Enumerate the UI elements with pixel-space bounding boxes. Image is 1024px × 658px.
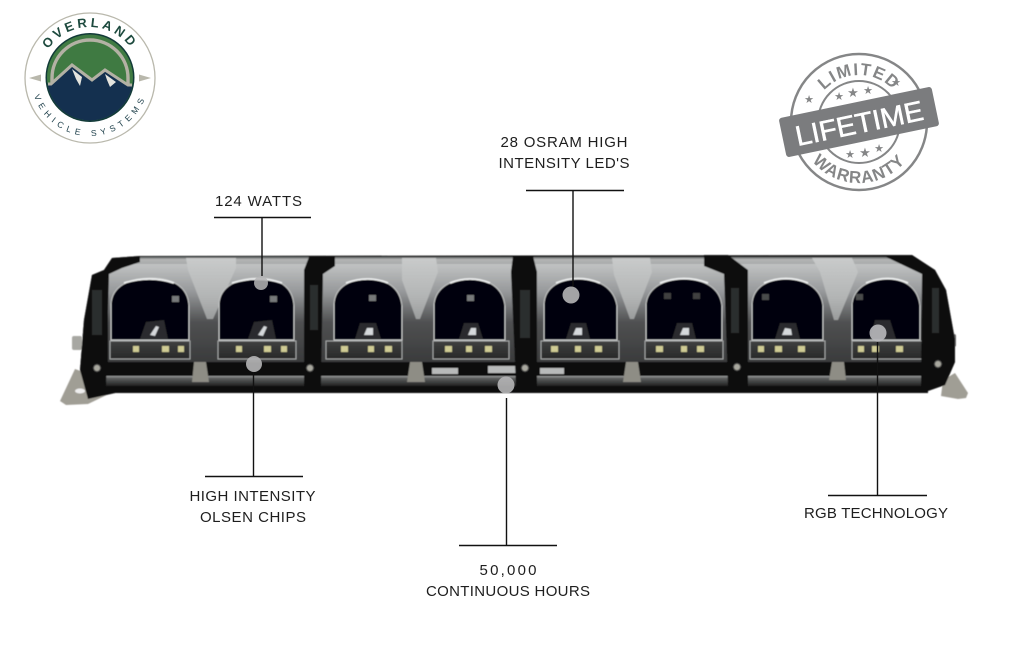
domes bbox=[111, 278, 920, 340]
callout: 28 Osram LEDs: 28 OSRAM HIGH bbox=[500, 134, 628, 151]
mounting feet bbox=[60, 369, 115, 405]
callout: 28 Osram LEDs: INTENSITY LED'S bbox=[498, 155, 630, 172]
callout: Olsen chips: OLSEN CHIPS bbox=[200, 509, 306, 526]
stamp stars: ★ bbox=[804, 94, 814, 106]
stamp stars: ★ bbox=[859, 145, 871, 160]
top cover and lens housing bbox=[130, 257, 900, 269]
logo: Overland Vehicle Systems badge bbox=[24, 12, 156, 144]
logo text: OVERLAND: OVERLAND bbox=[43, 18, 135, 48]
dome highlights bbox=[124, 278, 908, 283]
stamp ribbon: LIFETIME bbox=[793, 95, 926, 152]
stamp text: WARRANTY: WARRANTY bbox=[814, 153, 902, 184]
lower rail bbox=[104, 362, 928, 376]
callout: 50,000 hours: CONTINUOUS HOURS bbox=[426, 583, 590, 600]
stamp stars: ★ bbox=[834, 91, 844, 103]
callout: 50,000 hours bbox=[426, 376, 590, 600]
stamp stars: ★ bbox=[874, 143, 884, 155]
rail reflections bbox=[432, 366, 564, 374]
V-shaped lens dividers bbox=[186, 258, 858, 320]
product: LED light bar bbox=[60, 255, 968, 405]
stamp stars: ★ bbox=[847, 85, 859, 100]
stamp text: LIMITED: LIMITED bbox=[817, 63, 898, 90]
callout: RGB technology bbox=[804, 324, 948, 522]
clamp highlights bbox=[92, 285, 939, 338]
callout: 124 watts: 124 WATTS bbox=[215, 193, 302, 210]
callout: 50,000 hours: 50,000 bbox=[480, 562, 536, 579]
callout: 124 watts bbox=[214, 193, 311, 290]
emitters bbox=[140, 320, 896, 339]
small dome sensors bbox=[172, 293, 863, 302]
black clamps bbox=[80, 255, 955, 398]
stamp ribbon bbox=[779, 86, 939, 158]
LED strips bbox=[110, 341, 924, 359]
stamp stars: ★ bbox=[863, 85, 873, 97]
LED chips bbox=[133, 346, 903, 352]
bar body bbox=[80, 255, 955, 399]
callout: Olsen chips: HIGH INTENSITY bbox=[190, 488, 316, 505]
lens screws bbox=[192, 362, 846, 382]
bolts bbox=[94, 360, 942, 372]
badge: limited lifetime warranty stamp bbox=[779, 52, 939, 192]
logo text: VEHICLE SYSTEMS: VEHICLE SYSTEMS bbox=[34, 94, 144, 136]
stamp stars: ★ bbox=[845, 149, 855, 161]
callout: Olsen chips bbox=[190, 356, 316, 526]
stamp stars bbox=[804, 77, 901, 161]
callout: RGB technology: RGB TECHNOLOGY bbox=[804, 505, 948, 522]
callout: 28 Osram LEDs bbox=[498, 134, 630, 304]
stamp stars: ★ bbox=[891, 77, 901, 89]
